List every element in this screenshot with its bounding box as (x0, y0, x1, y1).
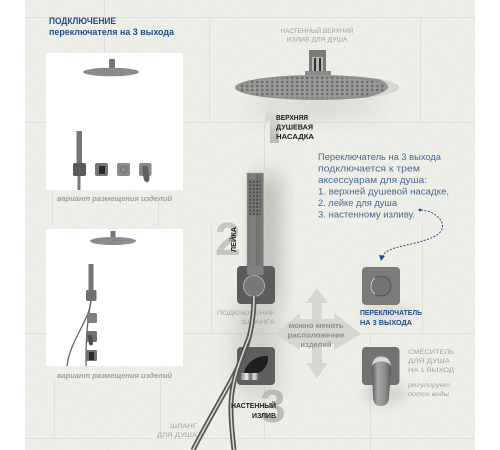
label: wall top spout (280, 26, 354, 44)
panel: placement variant 1 (46, 53, 183, 190)
label: hose connection (217, 310, 276, 326)
label: hose connection: ШЛАНГА (242, 319, 276, 326)
text block: switch description: 2. лейке для душа (318, 198, 397, 208)
label: shower hose: ДЛЯ ДУША (157, 432, 198, 439)
label: mixer: НА 1 ВЫХОД (408, 367, 454, 374)
label: switch: НА 3 ВЫХОДА (360, 318, 413, 327)
soft shadows (235, 96, 409, 404)
text: products can be rearranged: можно менять (288, 321, 344, 330)
text: products can be rearranged (288, 321, 344, 349)
label: mixer: ДЛЯ ДУША (408, 358, 451, 365)
number 3: 3 (260, 380, 286, 432)
label: hose connection: ПОДКЛЮЧЕНИЕ (217, 310, 276, 317)
text block: switch description: аксессуарам для душа: (318, 175, 427, 185)
label: switch (360, 308, 423, 327)
icon: hand shower (237, 173, 275, 304)
arrows: rearrange products (275, 288, 361, 378)
label: top shower head: ВЕРХНЯЯ (276, 113, 308, 122)
panel: placement variant 2 (46, 229, 183, 366)
text: products can be rearranged: расположение (288, 330, 344, 340)
text: products can be rearranged: изделий (300, 340, 332, 349)
text block: switch description (318, 152, 449, 220)
text block: switch description: 1. верхней душевой насадке, (318, 186, 449, 196)
label: mixer: поток воды (408, 390, 449, 398)
label: top shower head: ДУШЕВАЯ (276, 122, 313, 132)
label: switch: ПЕРЕКЛЮЧАТЕЛЬ (360, 308, 423, 317)
caption: variant 1: вариант размещения изделий (57, 195, 173, 203)
label: top shower head: НАСАДКА (276, 132, 314, 141)
title: переключателя на 3 выхода (49, 27, 174, 37)
label: mixer: регулирует (407, 382, 450, 389)
text block: switch description: Переключатель на 3 выхода (318, 152, 441, 162)
text block: switch description: 3. настенному изливу. (318, 210, 415, 220)
number 2: 2 (215, 213, 241, 265)
title (49, 16, 174, 37)
label: wall spout (231, 401, 276, 420)
label: shower hose (157, 423, 198, 439)
label: wall spout: ИЗЛИВ (252, 411, 276, 420)
label: top shower head (276, 113, 314, 141)
label: wall top spout: ИЗЛИВ ДЛЯ ДУША (286, 36, 348, 44)
label: wall spout: НАСТЕННЫЙ (231, 401, 276, 410)
icon: shower mixer (362, 347, 400, 406)
icon: three-way switch (362, 267, 400, 305)
icon: wall spout (237, 347, 275, 385)
arrow: dashed to switch (379, 209, 443, 261)
number 1 (265, 108, 279, 143)
label: mixer (407, 349, 455, 398)
icon: overhead shower head (235, 50, 399, 100)
label: hand shower: ЛЕЙКА (229, 227, 238, 252)
text block: switch description: подключается к трем (318, 164, 420, 174)
label: mixer: СМЕСИТЕЛЬ (408, 349, 455, 356)
label: shower hose: ШЛАНГ (170, 423, 197, 430)
icon: hose (193, 296, 254, 450)
label: wall top spout: НАСТЕННЫЙ ВЕРХНИЙ (280, 26, 354, 35)
title: ПОДКЛЮЧЕНИЕ (49, 16, 116, 26)
caption: variant 2: вариант размещения изделий (57, 372, 173, 380)
